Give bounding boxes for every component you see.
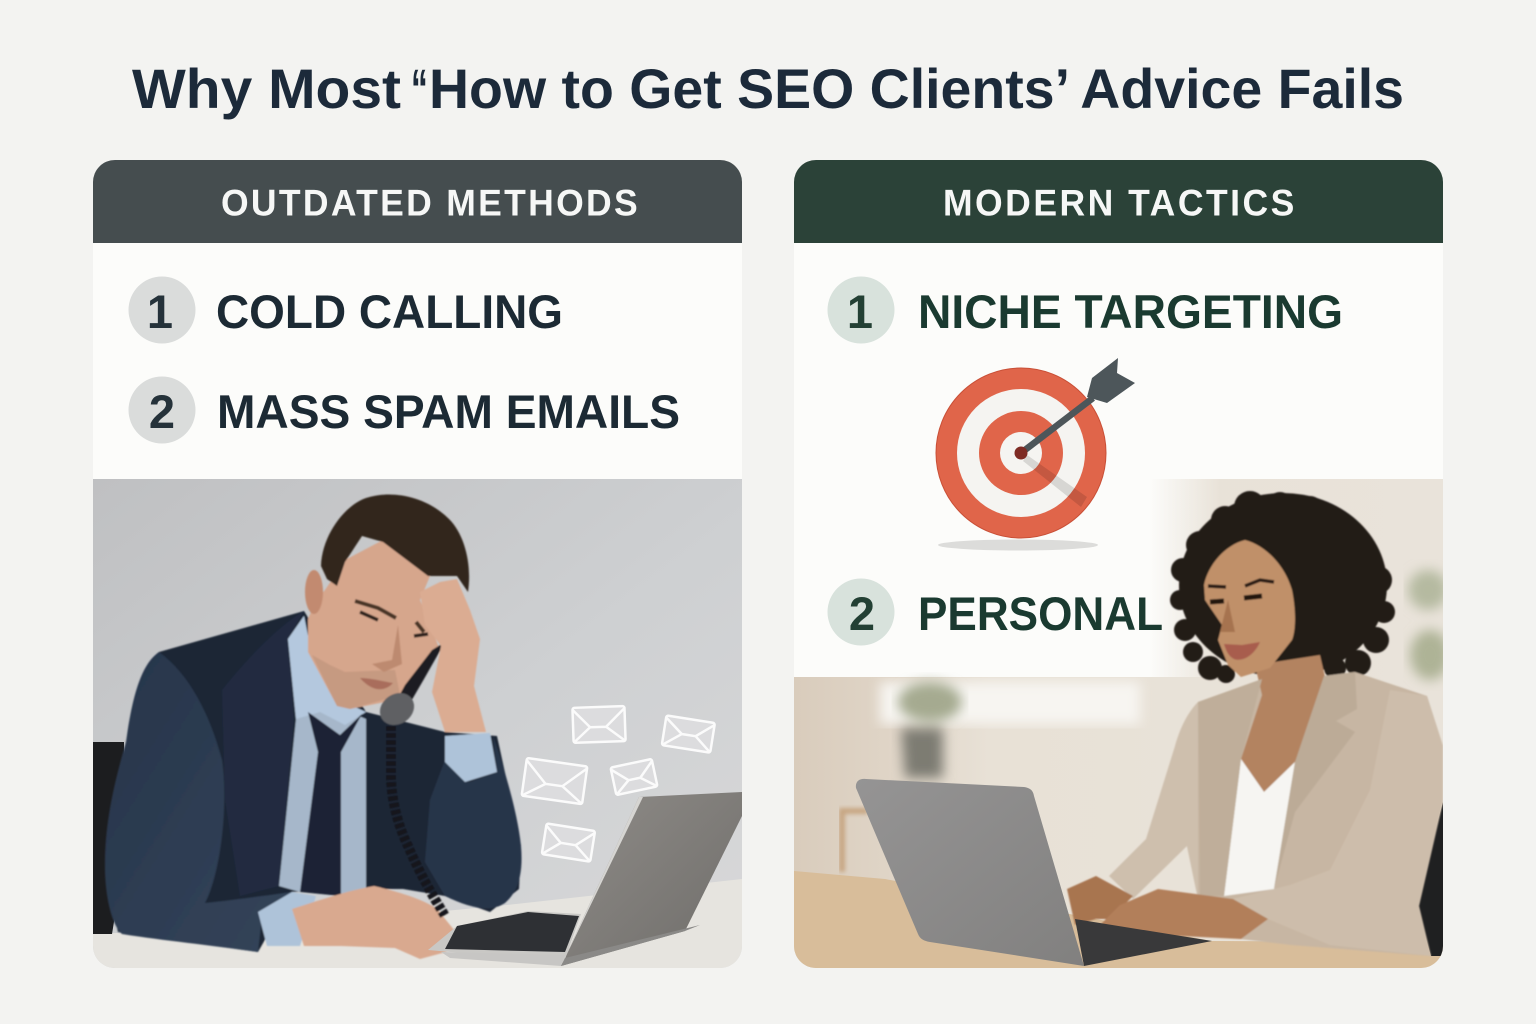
header: outdated methods: OUTDATED METHODS [221, 182, 638, 224]
raised hand [420, 579, 486, 732]
title: How to Get SEO Clients’ Advice Fails [429, 57, 1404, 120]
right lapel [1274, 672, 1357, 889]
neck and chest [1241, 655, 1328, 792]
item 2: mass spam emails: 2 [149, 385, 175, 438]
mouth [360, 678, 393, 689]
brows and eyes [355, 601, 424, 632]
item 1: niche targeting: NICHE TARGETING [918, 285, 1343, 338]
side stool [842, 811, 868, 872]
item 2: mass spam emails [128, 376, 680, 444]
phone handset [379, 644, 442, 726]
ear [305, 570, 323, 614]
jacket torso [105, 611, 521, 952]
item 1: niche targeting: 1 [847, 285, 873, 338]
chair [1418, 802, 1443, 956]
tie [300, 712, 362, 896]
right plants [1408, 570, 1450, 680]
hair [321, 494, 469, 592]
face [1204, 540, 1295, 677]
jacket chest left panel [222, 611, 304, 896]
laptop [428, 792, 742, 966]
neck and face [308, 540, 440, 709]
window glow [880, 682, 1140, 724]
white blend into panel [794, 479, 1220, 677]
hair [1170, 491, 1395, 683]
envelope 5 [542, 823, 595, 862]
icon: bullseye target with arrow [936, 358, 1135, 550]
background plant [898, 682, 962, 778]
brows [1208, 580, 1274, 587]
panel body: modern [794, 243, 1443, 479]
left hand [1067, 876, 1133, 925]
panel: outdated methods [93, 160, 742, 968]
item 2: personal: PERSONAL [918, 587, 1163, 640]
photo: smiling woman working at laptop [794, 479, 1450, 968]
chair [93, 742, 124, 934]
header: modern tactics: MODERN TACTICS [943, 182, 1294, 224]
woman [1067, 491, 1443, 956]
laptop [856, 779, 1212, 966]
blazer left sleeve [1109, 702, 1198, 899]
blazer right sleeve [1233, 690, 1443, 956]
item 1: cold calling [128, 276, 563, 344]
left shirt cuff [258, 892, 316, 946]
raised cuff [445, 733, 497, 782]
title: “ [411, 57, 428, 120]
item 2: personal [828, 578, 1163, 646]
header: outdated methods [93, 160, 742, 243]
envelopes [522, 706, 715, 862]
eyes [1210, 596, 1262, 602]
header: modern tactics [794, 160, 1443, 243]
jacket left sleeve [105, 652, 292, 952]
item 2: personal: 2 [849, 587, 875, 640]
envelope 3 [522, 758, 587, 804]
item 1: cold calling: COLD CALLING [216, 285, 563, 338]
item 1: cold calling: 1 [147, 285, 173, 338]
beard shadow [312, 655, 400, 709]
item 2: mass spam emails: MASS SPAM EMAILS [217, 385, 680, 438]
blazer torso [1187, 672, 1443, 956]
right hand and wrist [1100, 889, 1268, 942]
title: Why Most [132, 57, 401, 120]
desk [93, 879, 742, 968]
lower hand [292, 886, 459, 959]
envelope 2 [662, 715, 715, 753]
jacket right sleeve [425, 736, 522, 908]
panel body: outdated [93, 243, 742, 479]
item 1: niche targeting [828, 276, 1343, 344]
envelope 1 [572, 706, 626, 743]
nose shade [372, 625, 402, 672]
white top [1224, 759, 1295, 896]
phone cord [391, 726, 445, 916]
panel: modern tactics [794, 160, 1450, 968]
photo: stressed man on phone at laptop [93, 479, 742, 968]
shirt [279, 616, 366, 896]
desk [794, 871, 1443, 968]
left lapel [1198, 679, 1262, 896]
man [105, 494, 522, 959]
nose shade [1220, 600, 1235, 632]
smile [1224, 642, 1260, 660]
envelope 4 [611, 759, 657, 795]
